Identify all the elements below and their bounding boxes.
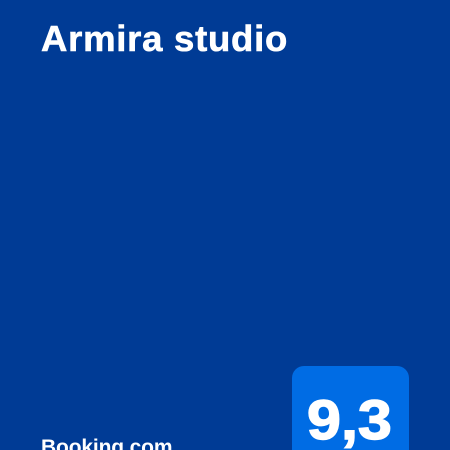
title: Armira studio	[41, 18, 288, 59]
score badge	[292, 366, 409, 450]
score value: 9,3	[307, 388, 392, 450]
